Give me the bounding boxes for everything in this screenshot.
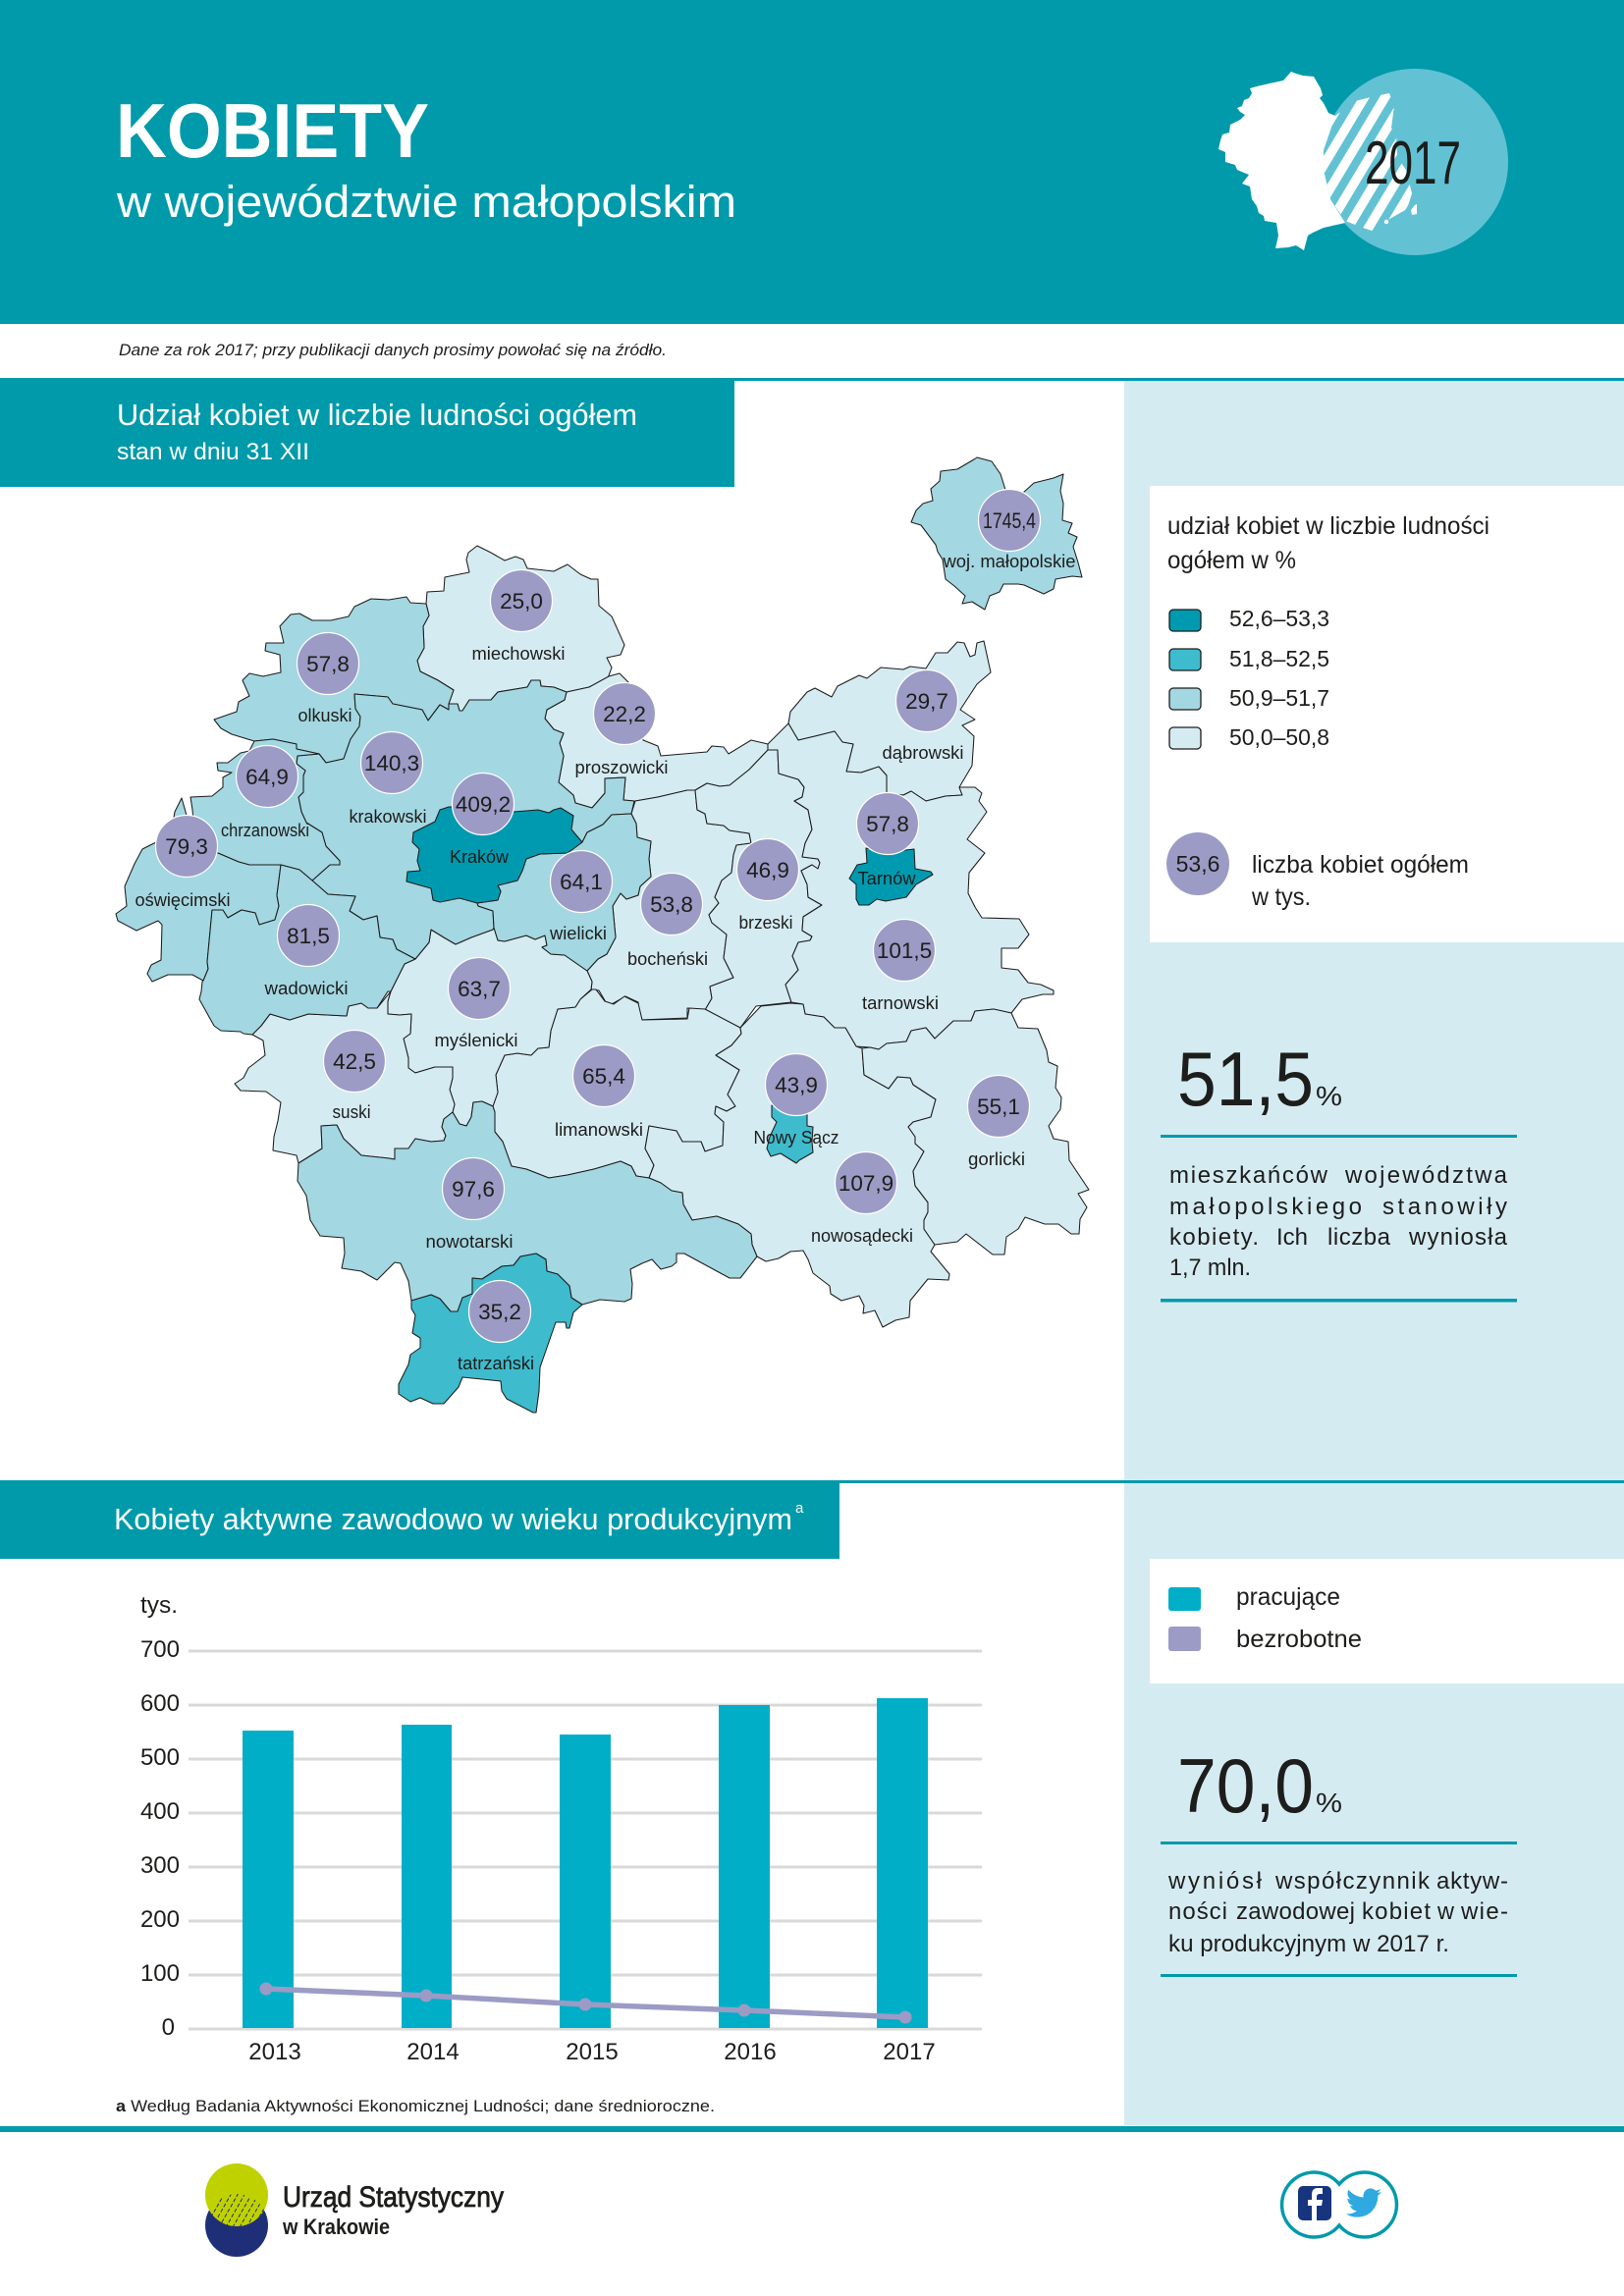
legend bubble: w tys. [1251,883,1311,911]
icon: region silhouette with year circle [1218,59,1511,255]
callout: 51,5%: wyniosła [1408,1224,1508,1251]
bubble: suski: suski [332,1102,371,1122]
region: Kraków [406,807,582,903]
callout: 70,0% [1161,1742,1517,1977]
legend class 1 [1169,606,1329,631]
callout: 51,5%: 51,5 [1177,1036,1314,1122]
region: Nowy Sącz [767,1105,813,1163]
callout: 51,5%: kobiety. [1169,1224,1259,1251]
legend: unemployed: bezrobotne [1236,1626,1362,1653]
bubble: olkuski: olkuski [298,706,352,725]
section heading: economically active women [0,1481,839,1559]
bubble: nowotarski [426,1158,513,1252]
bubble: proszowicki [575,683,668,777]
bubble: chrzanowski [221,746,309,840]
bubble: gorlicki: gorlicki [968,1149,1025,1169]
section heading: economically active women: a [795,1500,804,1517]
region: myślenicki [388,928,592,1126]
y axis labels: 600 [140,1690,180,1717]
callout: 70,0%: wie- [1460,1898,1508,1925]
bubble: brzeski [736,838,799,933]
region: bocheński [587,790,751,1020]
legend class 3: 50,9–51,7 [1229,685,1329,711]
bubble: krakowski: krakowski [350,807,426,827]
bubble: dąbrowski: 29,7 [905,689,948,714]
callout: 70,0%: ku produkcyjnym w 2017 r. [1168,1931,1449,1957]
bubble: gorlicki: 55,1 [977,1095,1020,1119]
chart legend panel [1150,1559,1624,1683]
bubble: chrzanowski: 64,9 [245,765,289,789]
map legend panel [1150,486,1624,942]
bubble: suski: 42,5 [333,1049,376,1074]
logo: Urząd Statystyczny w Krakowie: w Krakowie [282,2215,390,2239]
source note: Dane za rok 2017; przy publikacji danych prosimy powołać się na źródło. [119,342,667,359]
callout: 51,5% [1161,1036,1517,1302]
logo: Urząd Statystyczny w Krakowie [193,2163,504,2257]
region: tarnowski [768,723,1054,1049]
region: wadowicki [199,865,415,1035]
bubble: suski [324,1031,385,1122]
callout: 70,0%: aktyw- [1436,1868,1508,1895]
bubble: proszowicki: proszowicki [575,758,668,777]
bubble: wadowicki: 81,5 [287,924,330,948]
x axis labels: 2013 [248,2039,301,2065]
callout: 51,5%: % [1316,1081,1342,1111]
section heading: economically active women: Kobiety aktywne zawodowo w wieku produkcyjnym [114,1502,792,1536]
legend title: udział kobiet w liczbie ludności [1167,512,1489,540]
legend class 4 [1169,724,1329,750]
callout: 70,0%: ności [1168,1898,1227,1925]
bubble: Kraków: 409,2 [456,792,511,817]
callout: 70,0%: zawodowej [1236,1898,1355,1925]
bubble: chrzanowski: chrzanowski [221,821,309,840]
footnote: a Według Badania Aktywności Ekonomicznej Ludności; dane średnioroczne. [116,2097,715,2115]
legend class 1: 52,6–53,3 [1229,606,1329,631]
bubble: Kraków [450,774,514,867]
bubble: województwo [942,489,1076,571]
divider line second section [0,1480,1624,1483]
bubble: krakowski [350,732,426,827]
header band [0,0,1624,324]
title: KOBIETY [116,87,429,174]
legend bubble: liczba kobiet ogółem [1252,851,1469,879]
legend class 2: 51,8–52,5 [1229,646,1329,671]
callout: 70,0%: w [1436,1898,1455,1925]
bubble: Kraków: Kraków [450,847,510,867]
callout: 51,5%: województwa [1344,1162,1508,1189]
region: oświęcimski [116,798,281,982]
bars: employed [243,1698,928,2028]
bar and line chart [140,1592,982,2065]
legend class 2 [1169,646,1329,671]
bubble: tatrzański: tatrzański [458,1354,534,1373]
footer rule [0,2126,1624,2132]
region: dąbrowski [788,641,991,801]
bubble: olkuski: 57,8 [306,652,350,676]
choropleth map of counties [116,457,1089,1413]
bubble: krakowski: 140,3 [364,751,419,775]
y axis labels: 200 [140,1906,180,1933]
bubble: Tarnów: 57,8 [866,812,909,836]
x axis labels: 2015 [566,2039,619,2065]
region: limanowski [493,989,741,1178]
bubble: wadowicki [263,905,348,998]
bubble: województwo: 1745,4 [983,508,1036,533]
callout: 70,0%: % [1316,1788,1342,1818]
y axis labels: 300 [140,1852,180,1879]
bubble: oświęcimski: oświęcimski [135,890,230,910]
bubble: gorlicki [968,1076,1029,1169]
bubble: bocheński: 53,8 [650,892,693,917]
y axis labels: 500 [140,1744,180,1771]
bubble: myślenicki: myślenicki [434,1031,518,1050]
region: chrzanowski [190,739,340,881]
line: unemployed [259,1983,911,2024]
bubble: wielicki: 64,1 [560,870,603,894]
bubble: dąbrowski [882,669,964,763]
legend: unemployed [1168,1626,1362,1653]
legend title: ogółem w % [1167,547,1296,574]
y axis labels: 100 [140,1960,180,1987]
bubble: miechowski: 25,0 [500,589,543,614]
bubble: dąbrowski: dąbrowski [882,743,964,763]
bubble: miechowski [471,569,566,664]
bubble: tarnowski [862,919,939,1013]
section heading: share of women: stan w dniu 31 XII [117,439,309,465]
bubble: bocheński: bocheński [627,949,708,969]
county bubbles and labels [135,489,1076,1373]
bar and line chart: tys. [140,1592,178,1619]
bubble: bocheński [627,874,708,969]
right side panel background [1124,380,1624,2125]
region: Tarnów [849,848,933,905]
callout: 51,5%: stanowiły [1382,1194,1507,1220]
y axis labels [140,1636,180,2041]
bubble: tarnowski: tarnowski [862,993,939,1013]
callout: 70,0%: współczynnik [1274,1868,1431,1895]
legend bubble [1166,832,1469,911]
bubble: Nowy Sącz [754,1054,839,1148]
region: nowotarski [298,1101,757,1311]
x axis labels: 2014 [406,2039,460,2065]
bubble: nowosądecki: nowosądecki [811,1226,913,1246]
bubble: limanowski [555,1044,643,1140]
callout: 70,0%: kobiet [1362,1898,1431,1925]
callout: 51,5%: liczba [1327,1224,1391,1251]
icon: region silhouette with year circle: 2017 [1365,130,1461,197]
bubble: województwo: woj. małopolskie [942,552,1076,571]
bubble: limanowski: 65,4 [582,1064,625,1089]
bubble: myślenicki [434,958,518,1050]
bubble: brzeski: brzeski [738,913,793,933]
bubble: wielicki: wielicki [549,924,607,943]
callout: 51,5%: mieszkańców [1169,1162,1328,1189]
bubble: brzeski: 46,9 [746,858,789,882]
y axis labels: 0 [162,2014,175,2041]
x axis labels [248,2039,936,2065]
callout: 70,0%: wyniósł [1167,1868,1263,1895]
bubble: olkuski [297,632,359,725]
subtitle: w województwie małopolskim [116,177,736,227]
bubble: nowosądecki [811,1152,913,1246]
legend: employed: pracujące [1236,1583,1340,1611]
region: olkuski [214,597,454,763]
region: suski [235,991,455,1163]
bubble: wielicki [549,850,613,943]
bubble: nowotarski: nowotarski [426,1232,513,1252]
x axis labels: 2017 [883,2039,936,2065]
bubble: nowotarski: 97,6 [452,1177,495,1201]
region: nowosądecki [645,1003,949,1327]
y axis labels: 400 [140,1798,180,1825]
bubble: myślenicki: 63,7 [458,977,501,1001]
legend bubble: 53,6 [1176,851,1219,877]
bubble: oświęcimski: 79,3 [165,834,208,859]
bubble: tatrzański: 35,2 [478,1300,521,1324]
callout: 51,5%: małopolskiego [1169,1194,1362,1220]
bubble: oświęcimski [135,815,230,910]
section heading: share of women: Udział kobiet w liczbie ludności ogółem [117,398,637,432]
logo: Urząd Statystyczny w Krakowie: Urząd Statystyczny [283,2181,504,2214]
region: whole voivodeship inset [911,457,1082,610]
icon: twitter [1346,2188,1381,2217]
bubble: proszowicki: 22,2 [603,702,646,726]
bubble: wadowicki: wadowicki [263,979,348,998]
bubble: nowosądecki: 107,9 [839,1171,893,1196]
bubble: tarnowski: 101,5 [877,938,932,963]
bubble: Tarnów [856,793,919,888]
bubble: Nowy Sącz: 43,9 [775,1073,818,1097]
region: krakowski [297,680,634,959]
section heading: share of women [0,378,734,487]
y axis labels: 700 [140,1636,180,1663]
callout: 70,0%: 70,0 [1177,1742,1314,1829]
bubble: limanowski: limanowski [555,1120,643,1140]
bubble: Tarnów: Tarnów [858,869,917,888]
bubble: tatrzański [458,1280,534,1373]
callout: 51,5%: Ich [1276,1224,1308,1251]
legend: employed [1168,1583,1340,1611]
region: brzeski [695,750,822,1028]
bubble: miechowski: miechowski [471,644,566,664]
region: wielicki [477,814,651,971]
icon: facebook [1298,2186,1331,2220]
region: gorlicki [862,1009,1089,1255]
x axis labels: 2016 [724,2039,777,2065]
region: tatrzański [399,1254,582,1413]
icon: social media [1282,2172,1396,2237]
bubble: Nowy Sącz: Nowy Sącz [754,1128,839,1148]
callout: 51,5%: 1,7 mln. [1169,1255,1251,1281]
legend class 4: 50,0–50,8 [1229,724,1329,750]
region: miechowski [417,546,624,711]
legend class 3 [1169,685,1329,711]
region: proszowicki [545,673,768,808]
